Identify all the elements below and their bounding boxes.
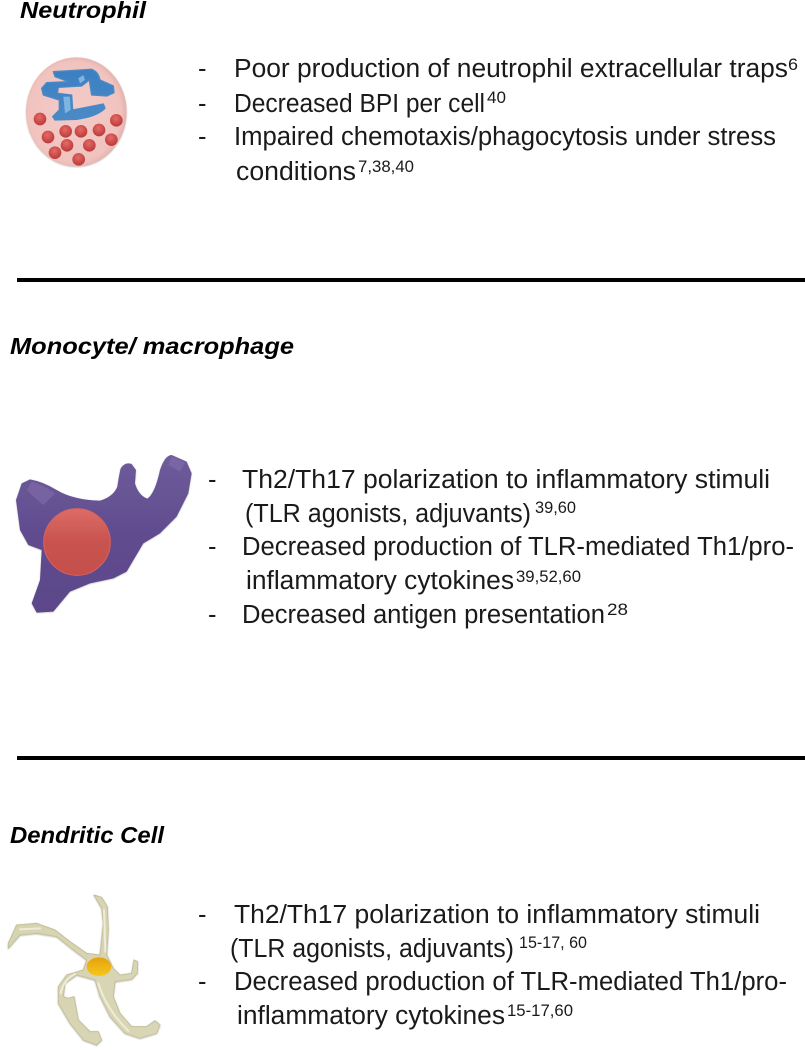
heading: Monocyte/ macrophage: Monocyte/ macrophage	[10, 333, 294, 359]
text block: monocyte findings: 39,52,60	[516, 568, 581, 586]
text block: neutrophil findings: conditions	[236, 158, 356, 186]
divider	[17, 278, 805, 282]
text block: dendritic cell findings: -	[198, 901, 206, 929]
text block: dendritic cell findings: Th2/Th17 polarization to inflammatory stimuli	[234, 901, 760, 929]
text block: monocyte findings: (TLR agonists, adjuvants)	[245, 500, 531, 528]
text block: dendritic cell findings: -	[198, 968, 206, 996]
text block: dendritic cell findings: 15-17, 60	[519, 934, 587, 952]
text block: dendritic cell findings: (TLR agonists, adjuvants)	[230, 935, 514, 963]
text block: monocyte findings: 39,60	[535, 499, 576, 517]
icon: neutrophil cell	[26, 57, 127, 167]
text block: monocyte findings: -	[208, 601, 216, 629]
text block: neutrophil findings	[198, 55, 798, 186]
text block: neutrophil findings: -	[198, 123, 206, 151]
icon: monocyte/macrophage cell	[16, 455, 192, 613]
text block: monocyte findings: -	[208, 466, 216, 494]
text block: dendritic cell findings: Decreased production of TLR-mediated Th1/pro-	[234, 968, 787, 996]
text block: dendritic cell findings: inflammatory cytokines	[237, 1002, 505, 1030]
text block: neutrophil findings: 40	[487, 89, 506, 107]
icon: dendritic cell	[8, 895, 160, 1045]
text block: monocyte findings: 28	[607, 601, 628, 619]
text block: monocyte findings	[208, 466, 794, 629]
divider	[17, 756, 805, 760]
text block: neutrophil findings: Poor production of neutrophil extracellular traps	[234, 55, 788, 83]
text block: neutrophil findings: 7,38,40	[358, 158, 414, 176]
text block: monocyte findings: Th2/Th17 polarization to inflammatory stimuli	[242, 466, 770, 494]
text block: monocyte findings: Decreased antigen presentation	[242, 601, 605, 629]
text block: neutrophil findings: -	[198, 55, 206, 83]
text block: monocyte findings: inflammatory cytokines	[246, 567, 514, 595]
heading: Dendritic Cell: Dendritic Cell	[10, 822, 165, 848]
text block: neutrophil findings: Decreased BPI per cell	[234, 90, 485, 118]
text block: neutrophil findings: 6	[788, 56, 798, 74]
text block: neutrophil findings: -	[198, 90, 206, 118]
text block: neutrophil findings: Impaired chemotaxis/phagocytosis under stress	[234, 123, 776, 151]
text block: dendritic cell findings	[198, 901, 787, 1030]
text block: monocyte findings: Decreased production of TLR-mediated Th1/pro-	[242, 533, 794, 561]
text block: dendritic cell findings: 15-17,60	[507, 1002, 573, 1020]
text block: monocyte findings: -	[208, 533, 216, 561]
